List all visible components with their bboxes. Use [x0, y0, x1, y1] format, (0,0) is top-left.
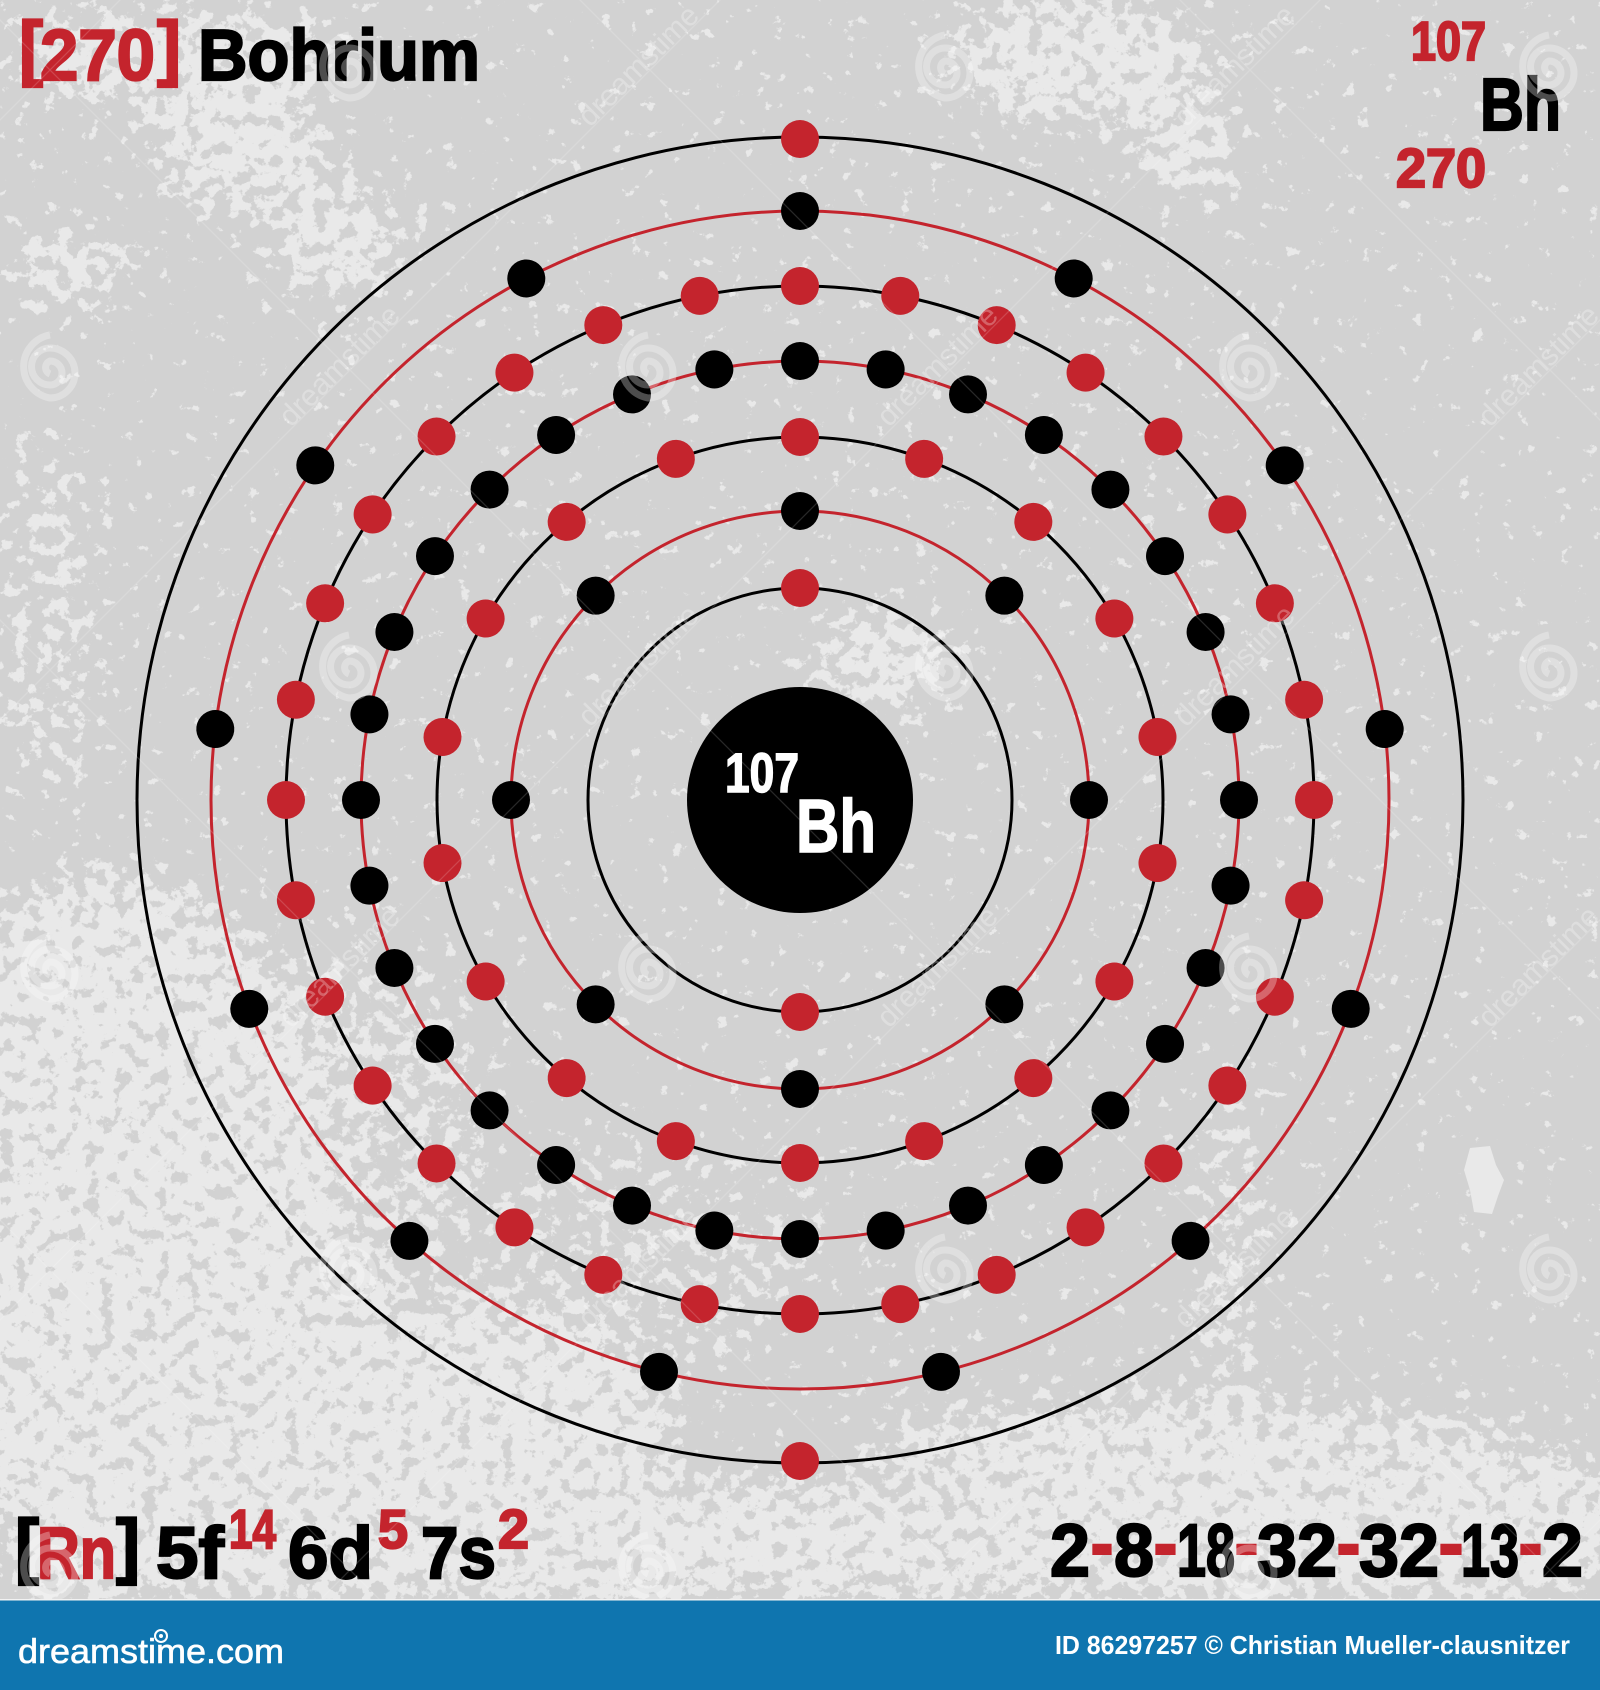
- footer logo: dreamstime.com: dreamstime.com: [18, 1633, 284, 1671]
- electron configuration, bottom left: 7s: [421, 1513, 496, 1594]
- electron configuration, bottom left: 5f: [156, 1513, 225, 1594]
- electrons per shell, bottom right: -: [1092, 1511, 1112, 1578]
- electron configuration, bottom left: Rn: [37, 1513, 116, 1594]
- electrons per shell, bottom right: 13: [1461, 1509, 1519, 1592]
- element symbol block, top right: [1396, 10, 1561, 199]
- electron configuration, bottom left: ]: [116, 1506, 140, 1586]
- electrons per shell, bottom right: -: [1236, 1511, 1257, 1578]
- title: atomic mass and element name: [19, 8, 480, 96]
- title: atomic mass and element name: Bohrium: [198, 16, 480, 96]
- shell 7: 2 electrons: [137, 120, 1463, 1480]
- electron configuration, bottom left: 6d: [288, 1513, 373, 1594]
- electrons per shell, bottom right: 18: [1177, 1509, 1235, 1592]
- electrons per shell, bottom right: 32: [1359, 1509, 1439, 1592]
- watermark overlay: dreamstime: [273, 900, 407, 1034]
- electrons per shell, bottom right: 2: [1542, 1509, 1583, 1592]
- watermark overlay: dreamstime: [572, 0, 706, 133]
- electron configuration, bottom left: 5: [378, 1498, 408, 1560]
- electrons per shell, bottom right: 32: [1257, 1509, 1337, 1592]
- watermark overlay: dreamstime: [1168, 1201, 1302, 1335]
- watermark overlay: dreamstime: [1168, 599, 1302, 733]
- nucleus: [687, 687, 913, 913]
- watermark overlay: dreamstime: [871, 299, 1005, 433]
- title: atomic mass and element name: 270: [40, 16, 155, 96]
- electrons per shell, bottom right: 2: [1050, 1509, 1090, 1592]
- footer credit: ID 86297257 © Christian Mueller-clausnitzer: [1055, 1630, 1570, 1660]
- element symbol block, top right: Bh: [1480, 63, 1561, 146]
- watermark overlay: dreamstime: [572, 1201, 706, 1335]
- shell 1: 2 electrons: [588, 569, 1012, 1031]
- electrons per shell, bottom right: -: [1440, 1511, 1462, 1578]
- electrons per shell, bottom right: -: [1520, 1511, 1541, 1578]
- atom diagram: electron shells: [137, 120, 1463, 1480]
- electrons per shell, bottom right: [1050, 1509, 1583, 1592]
- nucleus: Bh: [796, 784, 876, 868]
- watermark overlay: dreamstime: [871, 900, 1005, 1034]
- shell 6: 13 electrons: [194, 192, 1406, 1395]
- electron configuration, bottom left: [: [15, 1506, 39, 1586]
- shell 5: 32 electrons: [267, 267, 1333, 1333]
- element symbol block, top right: 270: [1396, 137, 1486, 199]
- nucleus: 107: [725, 741, 799, 804]
- shell 3: 18 electrons: [421, 418, 1179, 1182]
- watermark overlay: dreamstime: [273, 299, 407, 433]
- electron configuration, bottom left: 14: [229, 1498, 276, 1560]
- shell 2: 8 electrons: [492, 492, 1108, 1108]
- electrons per shell, bottom right: -: [1155, 1511, 1176, 1578]
- electrons per shell, bottom right: -: [1338, 1511, 1359, 1578]
- watermark overlay: dreamstime: [1168, 0, 1302, 133]
- element symbol block, top right: 107: [1411, 10, 1486, 72]
- shell 4: 32 electrons: [342, 342, 1258, 1258]
- footer bar: [0, 1599, 1600, 1690]
- electron configuration, bottom left: 2: [498, 1498, 529, 1560]
- electron configuration, bottom left: [15, 1498, 529, 1594]
- title: atomic mass and element name: ]: [157, 8, 181, 88]
- electrons per shell, bottom right: 8: [1114, 1509, 1154, 1592]
- title: atomic mass and element name: [: [19, 8, 43, 88]
- watermark overlay: dreamstime: [572, 599, 706, 733]
